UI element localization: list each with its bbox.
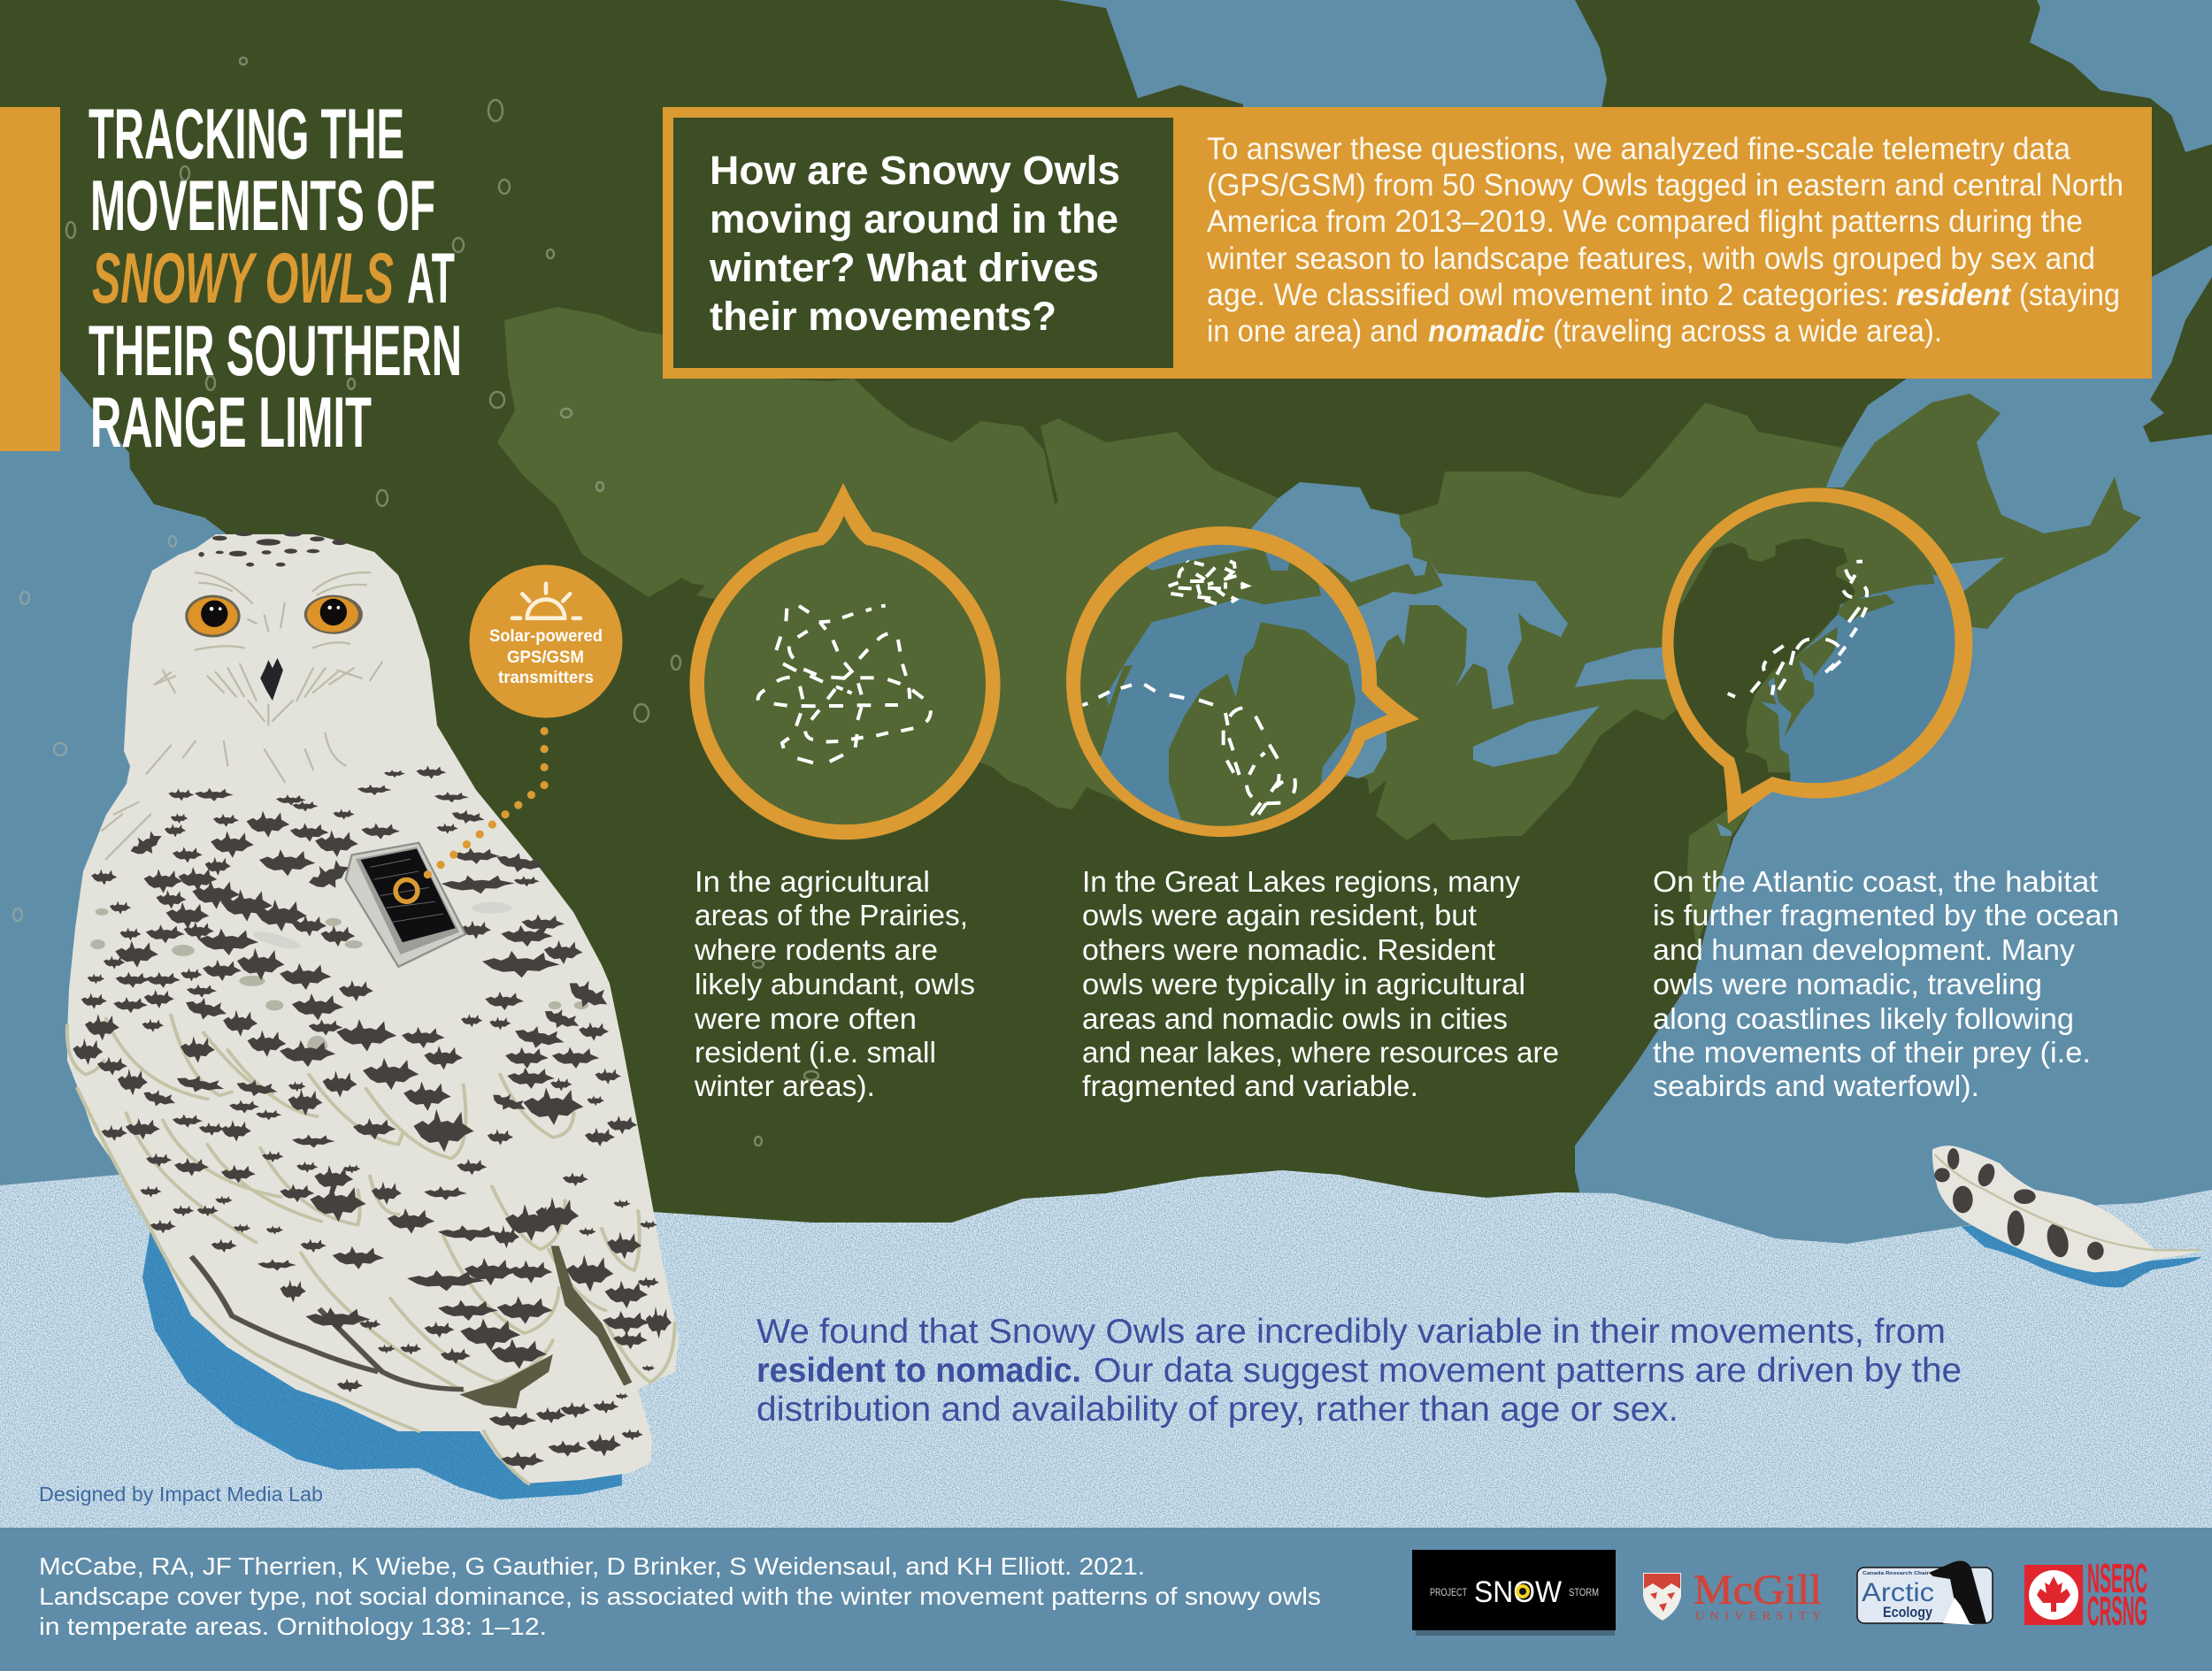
text block: Prairies: In the agricultural: [695, 865, 930, 898]
logo: Project SNOW storm: STORM: [1569, 1586, 1599, 1598]
bubble 3 ring: [1662, 488, 1972, 824]
logo: Canada Research Chair in Arctic Ecology: [1857, 1561, 1993, 1625]
logo: Canada Research Chair in Arctic Ecology: Ecology: [1883, 1604, 1932, 1621]
conclusion text: distribution and availability of prey, rather than age or sex.: [757, 1391, 1678, 1429]
text block: Atlantic coast: along coastlines likely following: [1653, 1002, 2074, 1035]
text block: Great Lakes: In the Great Lakes regions, many: [1082, 865, 1520, 898]
dotted connector from badge to transmitter: [424, 727, 549, 878]
faint snowflake specks across the map: [13, 57, 818, 1146]
conclusion text: [757, 1313, 1962, 1429]
bubble 1 movement tracks: [758, 606, 931, 763]
water: Chesapeake inlet: [1717, 823, 1732, 836]
methods text: winter season to landscape features, with owls grouped by sex and: [1206, 241, 2095, 276]
owl facial features: [102, 532, 382, 859]
logo: Canada Research Chair in Arctic Ecology: Canada Research Chair in: [1863, 1571, 1937, 1576]
water: Bay of Fundy: [1929, 557, 2005, 597]
bubble 1 interior: [698, 538, 990, 830]
logo: Canada Research Chair in Arctic Ecology: Arctic: [1862, 1578, 1934, 1607]
bubble 1 ring: [690, 483, 1000, 839]
water: Lake Superior: [1249, 482, 1427, 582]
methods text: [1206, 132, 2124, 349]
feather vane: [1932, 1146, 2203, 1272]
text block: Atlantic coast: the movements of their prey (i.e.: [1653, 1036, 2091, 1069]
owl lower markings: [140, 1151, 672, 1470]
panel: study question and methods: [663, 107, 2152, 379]
text block: Prairies: areas of the Prairies,: [695, 899, 968, 931]
credit: Designed by Impact Media Lab: [39, 1483, 323, 1506]
water: Lake Ontario: [1575, 646, 1681, 687]
citation: McCabe, RA, JF Therrien, K Wiebe, G Gauthier, D Brinker, S Weidensaul, and KH Elliott. 2021.: [39, 1552, 1145, 1580]
text block: Atlantic coast: and human development. Many: [1653, 933, 2076, 966]
methods text: (traveling across a wide area).: [1553, 314, 1942, 349]
methods text: (GPS/GSM) from 50 Snowy Owls tagged in eastern and central North: [1207, 168, 2124, 203]
conclusion text: Our data suggest movement patterns are driven by the: [1094, 1352, 1962, 1390]
owl lower feather outlines: [67, 1015, 675, 1483]
title: AT: [407, 239, 455, 318]
question box: their movements?: [710, 294, 1056, 339]
footer band: [0, 1528, 2212, 1671]
bubble 1: Prairies: [690, 483, 1000, 839]
text block: Prairies: likely abundant, owls: [695, 968, 975, 1000]
feather quill: [1935, 1154, 2201, 1250]
callout: solar-powered transmitter badge: Solar-powered: [489, 626, 603, 646]
logo: NSERC CRSNG: [2024, 1555, 2147, 1634]
title: [88, 95, 462, 463]
land: Newfoundland: [2143, 277, 2212, 442]
logo: McGill University: McGill: [1694, 1567, 1822, 1614]
illustration: feather: [1932, 1146, 2203, 1287]
snow ground: [0, 1150, 2212, 1530]
icon: GPS transmitter on owl: [346, 843, 465, 967]
text block: Prairies: [694, 865, 975, 1102]
methods text: To answer these questions, we analyzed fine-scale telemetry data: [1207, 132, 2071, 166]
text block: Atlantic coast: seabirds and waterfowl).: [1653, 1069, 1979, 1102]
map of eastern North America: [0, 0, 2212, 1256]
logo: McGill University: UNIVERSITY: [1695, 1610, 1821, 1623]
title: SNOWY OWLS: [92, 239, 394, 318]
land: boreal dark green: [0, 0, 2212, 1256]
text block: Great Lakes: owls were again resident, but: [1082, 899, 1477, 931]
text block: Atlantic coast: owls were nomadic, traveling: [1653, 968, 2042, 1000]
text block: Atlantic coast: On the Atlantic coast, the habitat: [1653, 865, 2098, 898]
owl body silhouette: [67, 534, 679, 1483]
text block: Prairies: were more often: [694, 1002, 917, 1035]
methods text: nomadic: [1428, 314, 1545, 349]
title: THEIR SOUTHERN: [88, 311, 462, 391]
icon: sun: [512, 584, 580, 618]
water: northern bay: [1058, 0, 1607, 119]
feather spots: [1934, 1148, 2104, 1260]
title: MOVEMENTS OF: [90, 166, 435, 246]
question box: moving around in the: [710, 196, 1118, 241]
question box: [673, 118, 1173, 368]
text block: Great Lakes: others were nomadic. Resident: [1082, 933, 1495, 966]
illustration: snowy owl: [67, 532, 679, 1483]
owl eye right: [304, 595, 363, 634]
citation: Landscape cover type, not social dominance, is associated with the winter movement patterns of snowy owls: [39, 1583, 1321, 1610]
question box: winter? What drives: [709, 245, 1099, 290]
logo: Project SNOW storm: [1412, 1550, 1616, 1636]
text block: Great Lakes: areas and nomadic owls in cities: [1082, 1002, 1508, 1035]
owl shadow on snow: [142, 1229, 622, 1499]
methods text: age. We classified owl movement into 2 categories:: [1207, 278, 1889, 312]
text block: Great Lakes: fragmented and variable.: [1082, 1069, 1418, 1102]
owl eye left: [185, 595, 241, 637]
question box: How are Snowy Owls: [710, 148, 1120, 193]
citation: [39, 1552, 1321, 1640]
title accent bar: [0, 107, 60, 451]
callout: solar-powered transmitter badge: transmitters: [498, 668, 594, 687]
text block: Prairies: resident (i.e. small: [695, 1036, 936, 1069]
water: southern Lake Huron: [1327, 732, 1386, 778]
water: Lake Huron and Georgian Bay: [1345, 558, 1568, 709]
bubble 3 map: [1674, 502, 1955, 794]
methods text: in one area) and: [1207, 314, 1418, 349]
text block: Great Lakes: [1082, 865, 1559, 1102]
logo: McGill University: [1643, 1567, 1822, 1623]
bubble 2 map: [1080, 545, 1387, 826]
conclusion text: We found that Snowy Owls are incredibly variable in their movements, from: [757, 1313, 1946, 1351]
logo: Project SNOW storm: PROJECT: [1430, 1586, 1467, 1598]
callout: solar-powered transmitter badge: GPS/GSM: [507, 648, 584, 667]
methods text: America from 2013–2019. We compared flight patterns during the: [1207, 204, 2083, 239]
callout: solar-powered transmitter badge: [469, 564, 623, 718]
text block: Atlantic coast: is further fragmented by the ocean: [1653, 899, 2119, 931]
title: TRACKING THE: [88, 95, 404, 174]
text block: Prairies: where rodents are: [694, 933, 938, 966]
text block: Great Lakes: and near lakes, where resources are: [1082, 1036, 1559, 1069]
feather shadow: [1962, 1225, 2201, 1287]
owl chest markings: [73, 766, 637, 1152]
logo: Project SNOW storm: SNOW: [1474, 1575, 1562, 1609]
text block: Prairies: winter areas).: [694, 1069, 875, 1102]
bubble 2: Great Lakes: [1066, 526, 1419, 837]
land: temperate mid green: [497, 307, 2141, 840]
citation: in temperate areas. Ornithology 138: 1–12.: [39, 1613, 547, 1640]
owl beak: [260, 658, 283, 701]
water: Lake Erie: [1473, 706, 1600, 767]
conclusion text: resident to nomadic.: [757, 1352, 1081, 1390]
text block: Great Lakes: owls were typically in agricultural: [1082, 968, 1525, 1000]
title: RANGE LIMIT: [90, 383, 372, 463]
land: coastal strip below Atlantic bubble: [1687, 807, 1752, 947]
bubble 3: Atlantic coast: [1662, 488, 1973, 824]
owl grey blotches: [90, 902, 588, 1056]
methods text: resident: [1896, 278, 2011, 312]
text block: Atlantic coast: [1653, 865, 2119, 1102]
bubble 2 ring: [1066, 526, 1419, 837]
methods text: (staying: [2019, 278, 2120, 312]
